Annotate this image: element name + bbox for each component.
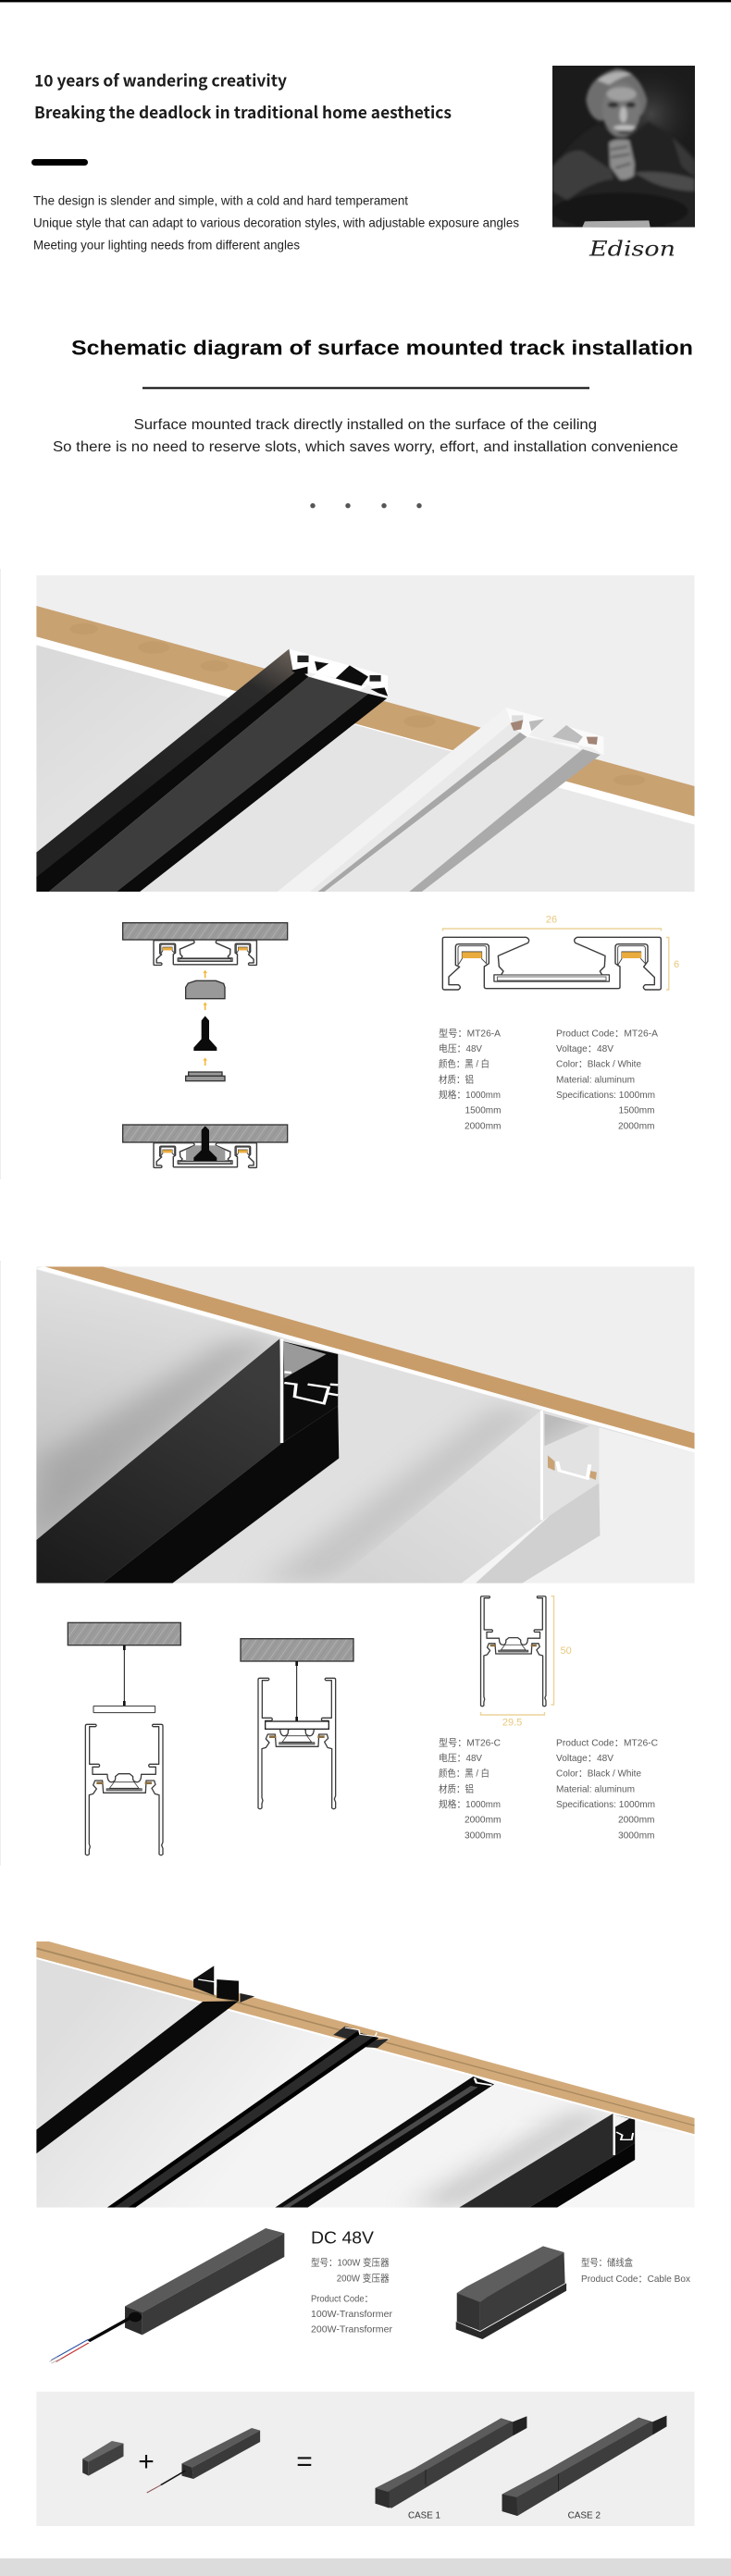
heading line 2: Breaking the deadlock in traditional home aesthetics	[34, 101, 452, 124]
step B plate	[266, 1721, 328, 1729]
track 3	[275, 2077, 494, 2208]
portrait photo	[552, 66, 695, 229]
footer band	[0, 2558, 731, 2576]
intro text block	[33, 193, 519, 252]
cable box specs: Product Code：Cable Box	[581, 2274, 691, 2285]
panel: schematic heading	[53, 336, 693, 508]
installation diagram	[68, 1622, 353, 1855]
cable box specs	[581, 2257, 691, 2285]
signature: Edison	[589, 239, 675, 261]
equals sign: =	[296, 2447, 313, 2477]
cable box specs: 型号：储线盒	[581, 2257, 633, 2269]
case 2 label: CASE 2	[568, 2509, 601, 2521]
track 4	[459, 2114, 615, 2208]
step A slab	[68, 1622, 180, 1645]
specs english: Material: aluminum	[556, 1074, 635, 1085]
specs chinese	[439, 1736, 502, 1841]
specs english	[556, 1028, 658, 1131]
cable box product	[456, 2246, 566, 2339]
dimension drawing	[442, 914, 679, 990]
specs chinese: 3000mm	[465, 1830, 502, 1841]
section edge 2	[0, 1261, 1, 1866]
installation diagram	[123, 923, 288, 1167]
specs chinese: 电压：48V	[439, 1752, 482, 1764]
step A plate	[93, 1706, 155, 1713]
specs chinese: 颜色：黑 / 白	[439, 1768, 489, 1780]
specs chinese: 电压：48V	[439, 1042, 482, 1054]
plus sign: +	[138, 2447, 155, 2477]
case 1 assembly	[376, 2416, 527, 2508]
height dimension	[666, 938, 669, 990]
top black bar	[0, 0, 731, 2]
panel: transformers and cable box	[36, 1941, 695, 2526]
specs english	[556, 1737, 658, 1841]
track 2	[333, 2027, 359, 2040]
step B hanger	[295, 1661, 298, 1721]
width dimension	[481, 1712, 544, 1715]
specs english: Specifications: 1000mm	[556, 1090, 655, 1101]
profile cross-section	[481, 1596, 546, 1707]
width label: 29.5	[502, 1718, 522, 1729]
specs chinese: 材质：铝	[439, 1782, 474, 1794]
step B slab	[241, 1639, 353, 1661]
hero image: four black tracks	[36, 1941, 695, 2208]
block	[186, 980, 225, 999]
case 2 assembly	[502, 2416, 666, 2516]
intro text block: Meeting your lighting needs from different angles	[33, 237, 300, 252]
specs chinese: 材质：铝	[439, 1073, 474, 1085]
ceiling slab top	[123, 923, 288, 940]
black profile side	[36, 1338, 282, 1584]
description text: So there is no need to reserve slots, which saves worry, effort, and installation convenience	[53, 439, 678, 455]
specs english: 3000mm	[618, 1830, 655, 1841]
hero image: deep profile tracks	[36, 1266, 695, 1584]
specs chinese: 规格：1000mm	[439, 1798, 501, 1810]
small cable box	[82, 2441, 124, 2476]
specs english: Product Code：MT26-A	[556, 1028, 658, 1039]
width dimension	[442, 929, 661, 931]
track 1	[193, 1966, 215, 1995]
panel: product MT26-C	[36, 1266, 695, 1855]
description text	[53, 417, 678, 455]
specs english: Color：Black / White	[556, 1059, 641, 1070]
specs english: Voltage：48V	[556, 1043, 613, 1054]
specs english: Material: aluminum	[556, 1783, 635, 1794]
profile cross-section	[442, 937, 661, 990]
specs chinese: 颜色：黑 / 白	[439, 1058, 489, 1070]
transformer specs: 型号：100W 变压器	[311, 2257, 390, 2269]
arrow 3	[203, 1057, 207, 1066]
panel: intro	[31, 66, 695, 262]
specs chinese: 2000mm	[465, 1120, 502, 1131]
small transformer	[147, 2428, 260, 2493]
step B profile	[258, 1678, 336, 1809]
height label: 50	[561, 1645, 572, 1657]
step A profile	[85, 1724, 163, 1855]
specs english: Specifications: 1000mm	[556, 1799, 655, 1810]
specs chinese: 型号：MT26-C	[439, 1736, 501, 1748]
specs english: Voltage：48V	[556, 1753, 613, 1764]
specs chinese	[439, 1027, 502, 1131]
screw	[193, 1016, 217, 1051]
specs chinese: 规格：1000mm	[439, 1089, 501, 1101]
DC voltage heading: DC 48V	[311, 2229, 374, 2248]
panel: product MT26-A	[36, 575, 695, 1167]
dimension drawing	[481, 1596, 572, 1729]
heading line 1: 10 years of wandering creativity	[34, 68, 287, 92]
gray combination panel	[36, 2392, 695, 2526]
four dots	[310, 503, 422, 508]
specs english: Product Code：MT26-C	[556, 1737, 658, 1748]
specs english: 2000mm	[618, 1120, 655, 1131]
white profile side	[355, 1411, 540, 1584]
specs chinese: 2000mm	[465, 1815, 502, 1826]
assembled block and screw	[186, 1145, 225, 1161]
transformer specs: 100W-Transformer	[311, 2309, 392, 2320]
accent bar	[31, 159, 88, 166]
height label: 6	[674, 959, 679, 970]
arrow 1	[203, 970, 207, 978]
arrow 2	[203, 1002, 207, 1010]
black track	[36, 649, 298, 879]
height dimension	[551, 1596, 553, 1705]
specs english: 1500mm	[618, 1105, 655, 1116]
base plate	[186, 1072, 225, 1081]
white track	[453, 727, 514, 766]
specs english: Color：Black / White	[556, 1769, 641, 1780]
transformer product	[49, 2228, 284, 2363]
transformer specs	[311, 2257, 392, 2336]
hero image: surface mounted tracks	[36, 575, 695, 892]
width label: 26	[546, 914, 557, 925]
specs chinese: 型号：MT26-A	[439, 1027, 501, 1039]
ceiling slab bottom	[123, 1125, 288, 1142]
intro text block: Unique style that can adapt to various decoration styles, with adjustable exposure angles	[33, 216, 519, 230]
step A hanger	[123, 1645, 126, 1706]
profile top	[154, 941, 256, 965]
transformer specs: Product Code：	[311, 2293, 373, 2304]
specs english: 2000mm	[618, 1815, 655, 1826]
intro text block: The design is slender and simple, with a cold and hard temperament	[33, 193, 408, 208]
combination equation	[82, 2416, 666, 2521]
transformer specs: 200W 变压器	[337, 2272, 390, 2284]
section title: Schematic diagram of surface mounted track installation	[71, 336, 693, 359]
specs chinese: 1500mm	[465, 1105, 502, 1116]
description text: Surface mounted track directly installed on the surface of the ceiling	[134, 417, 597, 433]
assembled profile	[154, 1143, 256, 1167]
transformer specs: 200W-Transformer	[311, 2324, 392, 2336]
title underline	[142, 387, 589, 388]
section edge 1	[0, 569, 1, 1179]
case 1 label: CASE 1	[408, 2509, 440, 2521]
